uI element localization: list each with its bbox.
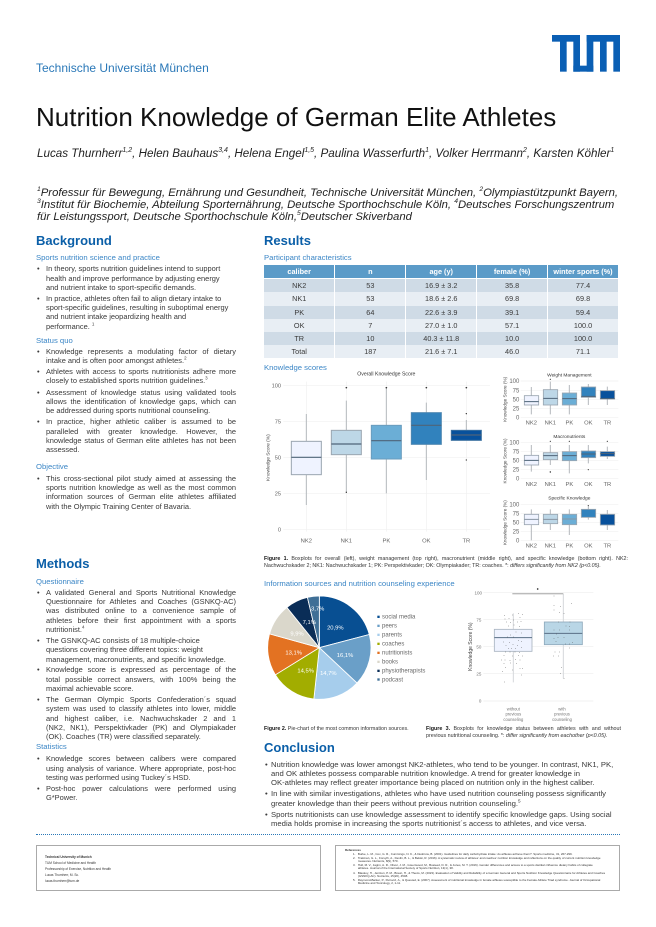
bullet: Knowledge score is expressed as percentage of the	[46, 665, 236, 674]
chart: macronutrients: NK2	[526, 482, 537, 488]
legend: parents	[382, 633, 402, 639]
chart: weight management: 25	[513, 406, 520, 412]
table: participant characteristics: PK	[294, 308, 304, 317]
chart: overall knowledge score boxplot: NK2	[301, 538, 312, 544]
chart: knowledge by counseling boxplot	[468, 588, 594, 722]
contact details: Technical University of Munich	[45, 855, 92, 859]
bullet: and nutrient intake to sport-specific demands.	[46, 283, 196, 292]
bullet: (NK2, NK1), Perspektivkader (PK) and Olympiakader	[46, 723, 236, 732]
chart: weight management: 0	[516, 415, 520, 421]
chart: overall knowledge score boxplot: NK1	[341, 538, 352, 544]
chart: knowledge by counseling boxplot: 0	[479, 699, 482, 704]
authors: Lucas Thurnherr1,2, Helen Bauhaus3,4, Helena Engel1,5, Paulina Wasserfurth1, Volker Herrmann2, Karsten Köhler1	[37, 147, 614, 160]
chart: knowledge by counseling boxplot: counseling	[503, 717, 524, 722]
table: participant characteristics: TR	[294, 334, 304, 343]
chart: specific knowledge: OK	[584, 543, 593, 549]
contact details: TUM School of Medicine and Health	[45, 861, 96, 865]
chart: information sources pie: 13,1%	[285, 650, 302, 656]
chart: information sources pie: 14,5%	[297, 669, 314, 675]
conclusion bullet: Sports nutritionists can use knowledge assessment to identify specific knowledge gaps. Using social	[271, 810, 612, 819]
panel: contact	[36, 845, 321, 891]
caption: figure 1: Figure 1. Boxplots for overall (left), weight management (top right), macronutrient (middle right), and specific knowledge (bottom right). NK2:	[264, 556, 628, 562]
bullet	[46, 417, 236, 455]
conclusion bullet	[271, 760, 616, 788]
significance bracket	[512, 592, 563, 596]
legend: social media	[382, 615, 416, 621]
chart: macronutrients: 50	[513, 459, 520, 465]
reference 4	[353, 870, 605, 878]
bullet: system was used to classify athletes into lower, middle	[46, 704, 236, 713]
bullet: athletes before their first appointment with a sports	[46, 616, 236, 625]
chart: specific knowledge: NK1	[545, 543, 556, 549]
chart: macronutrients: 100	[509, 440, 520, 446]
chart: weight management: 100	[509, 379, 520, 385]
table: participant characteristics: 46.0	[505, 347, 519, 356]
table: participant characteristics: 53	[366, 294, 374, 303]
chart: knowledge by counseling boxplot: with	[558, 707, 566, 712]
bullet	[46, 474, 236, 511]
panel: conclusion	[264, 740, 613, 828]
bullet	[46, 264, 236, 292]
bullet: testing was performed using Tuckey´s HSD.	[46, 773, 191, 782]
bullet: In practice, higher athletic caliber is assumed to be	[46, 417, 236, 426]
table: participant characteristics: female (%)	[494, 267, 530, 276]
bullet: In theory, sports nutrition guidelines intend to support	[46, 264, 220, 273]
chart: macronutrients: OK	[584, 482, 593, 488]
bullet: assessed.	[46, 445, 80, 454]
caption: figure 3	[426, 726, 621, 738]
affiliations: 3Institut für Biochemie, Abteilung Sporternährung, Deutsche Sporthochschule Köln, 4Deutsches Forschungszentrum	[37, 198, 614, 211]
panel: background	[36, 233, 236, 511]
heading: conclusion: Conclusion	[264, 740, 335, 755]
subheading: objective: Objective	[36, 462, 68, 471]
table: participant characteristics: 69.8	[505, 294, 519, 303]
chart: overall knowledge score boxplot: PK	[382, 538, 390, 544]
bullet: with the Olympic Training Center of Bavaria.	[46, 502, 191, 511]
conclusion bullet	[271, 810, 616, 828]
affiliations: für Leistungssport, Deutsche Sporthochschule Köln,5Deutscher Skiverband	[37, 210, 412, 223]
caption: figure 1: Nachwuchskader 2; NK1: Nachwuchskader 1; PK: Perspektivkader; OK: Olympiakader; TR: coaches. *: differs significantly from NK2 (p<0.05).	[264, 562, 601, 568]
table: participant characteristics: 18.6 ± 2.6	[425, 294, 457, 303]
contact details: lucas.thurnherr@tum.de	[45, 879, 79, 883]
table: participant characteristics: Total	[291, 347, 307, 356]
bullet: Assessment of knowledge status using validated tools	[46, 388, 236, 397]
chart: specific knowledge: 75	[513, 511, 520, 517]
table: participant characteristics: 100.0	[574, 321, 592, 330]
reference 3	[353, 863, 593, 870]
chart: macronutrients: Knowledge Score (%)	[502, 438, 507, 484]
chart: macronutrients: TR	[603, 482, 611, 488]
bullet	[46, 784, 236, 802]
chart: knowledge by counseling boxplot: counseling	[552, 717, 573, 722]
subheading: sports nutrition science and practice: Sports nutrition science and practice	[36, 253, 160, 262]
chart: weight management: 50	[513, 397, 520, 403]
table: participant characteristics: OK	[294, 321, 304, 330]
bullet: closely to established sports nutrition guidelines.3	[46, 376, 208, 385]
bullet: A validated General and Sports Nutritional Knowledge	[46, 588, 236, 597]
table: participant characteristics: 39.1	[505, 308, 519, 317]
table: participant characteristics: 22.6 ± 3.9	[425, 308, 457, 317]
chart: overall knowledge score boxplot: 0	[278, 527, 281, 533]
legend: physiotherapists	[382, 669, 425, 675]
legend: nutritionists	[382, 651, 412, 657]
bullet: G*Power.	[46, 793, 77, 802]
reference 2	[353, 856, 601, 863]
chart: overall knowledge score boxplot: TR	[462, 538, 470, 544]
chart: weight management: Weight Management	[547, 373, 592, 379]
references heading: References	[345, 848, 361, 852]
table: participant characteristics: 57.1	[505, 321, 519, 330]
bullet: Knowledge scores between calibers were compared	[46, 754, 236, 763]
chart: weight management: 75	[513, 388, 520, 394]
conclusion bullet: media holds promise in increasing the sports nutritionist´s access to athletes, and vice versa.	[271, 819, 586, 828]
table: participant characteristics: NK2	[292, 281, 306, 290]
chart: overall knowledge score boxplot: OK	[422, 538, 431, 544]
icon: TUM logo	[552, 35, 620, 72]
chart: specific knowledge: 25	[513, 529, 520, 535]
table: participant characteristics: 40.3 ± 11.8	[423, 334, 459, 343]
table: participant characteristics: winter sports (%)	[553, 267, 613, 276]
panel: methods	[36, 556, 236, 802]
chart: overall knowledge score boxplot: 75	[275, 420, 281, 426]
chart: weight management: TR	[603, 420, 611, 426]
table: participant characteristics: 27.0 ± 1.0	[425, 321, 457, 330]
caption: figure 3: previous nutritional counseling. *: differ significantly from eachother (p<0.05).	[426, 732, 607, 738]
legend: podcast	[382, 677, 403, 683]
table: participant characteristics: 100.0	[574, 334, 592, 343]
bullet: This cross-sectional pilot study aimed at assessing the	[46, 474, 236, 483]
conclusion bullet: In line with similar investigations, athletes who have used nutrition counseling possess significantly	[271, 789, 606, 798]
chart: specific knowledge: PK	[565, 543, 573, 549]
chart: knowledge by counseling boxplot: 75	[476, 617, 482, 622]
chart: knowledge by counseling boxplot: previous	[554, 712, 570, 717]
subheading: status quo: Status quo	[36, 336, 73, 345]
table: participant characteristics: 7	[368, 321, 372, 330]
bullet	[46, 388, 236, 416]
reference 5: Medicine and Toxicology, 2, 1-11.	[358, 881, 401, 885]
table: participant characteristics: NK1	[292, 294, 306, 303]
table: participant characteristics: 10.0	[505, 334, 519, 343]
bullet: The GSNKQ-AC consists of 18 multiple-choice	[46, 636, 200, 645]
reference 4: 4. Blaukoy, H., Jentzen, P. M., Braun, H., & Thevis, M. (2023). Evaluation of Validity and Reliability of a German General and Sports Nutrition Knowledge Questionnaire for Athletes and Coaches	[353, 870, 605, 874]
bullet: be addressed during sports nutritional counseling.	[46, 406, 210, 415]
chart: weight management: NK1	[545, 420, 556, 426]
bullet: and highest caliber, i.e. Nachwuchskader 2 and 1	[46, 714, 236, 723]
contact details: Professorship of Exercise, Nutrition and Health	[45, 867, 111, 871]
chart: specific knowledge: Knowledge Score (%)	[502, 500, 507, 545]
reference 3: athletes. Journal of the International Society of Sports Nutrition, 13(1), 38.	[358, 866, 454, 870]
chart: overall knowledge score boxplot: Knowledge Score (%)	[266, 434, 272, 481]
chart: macronutrients: 25	[513, 468, 520, 474]
chart: specific knowledge: TR	[603, 543, 611, 549]
panel: references	[335, 845, 620, 891]
chart: specific knowledge: NK2	[526, 543, 537, 549]
table: participant characteristics: 53	[366, 281, 374, 290]
reference 3: 3. Hull, M. V., Jagim, A. R., Oliver, J. M., Greenwood, M., Busteed, D. R., & Jones, M. T. (2016). Gender differences and access to a sports dietitian influence dietary habits of collegiate	[353, 863, 593, 867]
reference 4: (GSNKQ-AC). Nutrients, 15(20), 4508.	[358, 874, 408, 878]
contact details	[45, 855, 111, 883]
bullet: performance. 1	[46, 321, 94, 331]
chart: specific knowledge: Specific Knowledge	[548, 496, 591, 502]
bullet: health and improve performance by adjusting energy	[46, 274, 220, 283]
bullet: Post-hoc power calculations were performed using	[46, 784, 236, 793]
chart: specific knowledge	[502, 496, 618, 549]
table: participant characteristics: caliber	[287, 267, 311, 276]
chart: knowledge by counseling boxplot: 50	[476, 644, 482, 649]
chart: macronutrients: NK1	[545, 482, 556, 488]
conclusion bullet	[271, 789, 616, 808]
bullet	[46, 347, 236, 366]
chart: information sources pie	[268, 596, 426, 699]
chart: macronutrients: PK	[565, 482, 573, 488]
legend: coaches	[382, 642, 404, 648]
chart: knowledge by counseling boxplot: previous	[505, 712, 521, 717]
bullet	[46, 636, 236, 664]
table: participant characteristics: 187	[364, 347, 376, 356]
heading: results: Results	[264, 233, 311, 248]
legend	[377, 615, 425, 683]
chart: macronutrients: 75	[513, 450, 520, 456]
table: participant characteristics: 69.8	[576, 294, 590, 303]
affiliations	[37, 186, 618, 223]
chart: information sources pie: 7,1%	[303, 620, 316, 626]
chart: weight management: NK2	[526, 420, 537, 426]
heading: background: Background	[36, 233, 112, 248]
university name: Technische Universität München	[36, 61, 209, 75]
conclusion bullet: Nutrition knowledge was lower amongst NK2-athletes, who tend to be younger. In contrast, NK1, PK,	[271, 760, 613, 769]
affiliations: 1Professur für Bewegung, Ernährung und Gesundheit, Technische Universität München, 2Olympiastützpunkt Bayern,	[37, 186, 618, 199]
chart: information sources pie: 14,7%	[320, 671, 337, 677]
bullet: information sources of German elite athletes affiliated	[46, 492, 236, 501]
table: participant characteristics: 21.6 ± 7.1	[425, 347, 457, 356]
table: participant characteristics	[264, 265, 618, 358]
chart: overall knowledge score boxplot: 100	[272, 384, 281, 390]
bullet: allows the identification of knowledge gaps, which can	[46, 397, 236, 406]
chart: specific knowledge: 0	[516, 538, 520, 544]
bullet	[46, 367, 236, 386]
footer divider	[36, 834, 620, 835]
bullet: nutritionist.4	[46, 624, 84, 634]
chart: information sources pie: 3,7%	[311, 606, 324, 612]
bullet: Athletes with access to sports nutritionists adhere more	[46, 367, 236, 376]
chart: macronutrients	[502, 434, 618, 488]
contact details: Lucas Thurnherr, M. Sc.	[45, 873, 79, 877]
chart: knowledge by counseling boxplot: 100	[474, 590, 482, 595]
table: participant characteristics: 77.4	[576, 281, 590, 290]
bullet: The German Olympic Sports Confederation´s squad	[46, 695, 236, 704]
chart: knowledge by counseling boxplot: Knowledge Score (%)	[468, 622, 474, 671]
table: participant characteristics: n	[368, 267, 373, 276]
table: participant characteristics: 16.9 ± 3.2	[425, 281, 457, 290]
reference 5: 5. Raymond-Barker, P., Petroczi, A., & Quested, E. (2007). Assessment of nutritional knowledge in female athletes susceptible to the Female Athlete Triad syndrome. Journal of Occupational	[353, 878, 600, 882]
subheading: information sources: Information sources and nutrition counseling experience	[264, 579, 455, 588]
chart: knowledge by counseling boxplot: without	[507, 707, 521, 712]
bullet	[46, 754, 236, 782]
bullet: management, macronutrients, and specific knowledge.	[46, 655, 226, 664]
bullet	[46, 665, 236, 693]
significance star	[537, 588, 538, 590]
caption: figure 3: Figure 3. Boxplots for knowledge status between athletes with and without	[426, 726, 621, 732]
charts: subscale boxplots	[502, 373, 618, 549]
table: participant characteristics: 59.4	[576, 308, 590, 317]
subheading: knowledge scores: Knowledge scores	[264, 363, 327, 372]
chart: knowledge by counseling boxplot: 25	[476, 671, 482, 676]
bullet: intake and is often poor amongst athletes.2	[46, 356, 187, 365]
bullet: knowledge status of German elite athletes has not been	[46, 436, 236, 445]
chart: specific knowledge: 50	[513, 520, 520, 526]
reference 2: measures. Nutrients, 8(9), 570.	[358, 859, 398, 863]
subheading: statistics: Statistics	[36, 742, 67, 751]
chart: overall knowledge score boxplot: 50	[275, 456, 281, 462]
bullet: total possible correct answers, with 100% being the	[46, 675, 236, 684]
chart: information sources pie: 9,9%	[290, 632, 304, 638]
bullet	[46, 588, 236, 634]
bullet: (OK). Coaches (TR) were classified separately.	[46, 732, 201, 741]
table: participant characteristics: 71.1	[576, 347, 590, 356]
bullet: Questionnaire for Athletes and Coaches (GSNKQ-AC)	[46, 597, 236, 606]
subheading: participant characteristics: Participant characteristics	[264, 253, 352, 262]
chart: information sources pie: 20,9%	[327, 625, 344, 631]
bullet	[46, 695, 236, 742]
table: participant characteristics: age (y)	[429, 267, 453, 276]
bullet: using analysis of variance. Where appropriate, post-hoc	[46, 764, 236, 773]
conclusion bullet: OK-athletes may reflect greater importance being placed on nutrition only in the highest caliber.	[271, 778, 594, 787]
bullet: was distributed online to a convenience sample of	[46, 606, 236, 615]
conclusion bullet: greater knowledge than their peers without previous nutrition counseling.5	[271, 798, 521, 808]
bullet: questions covering three different topics: weight	[46, 645, 203, 654]
bullet: and nutrient intake jeopardizing health and	[46, 312, 186, 321]
bullet	[46, 294, 236, 331]
bullet: Knowledge represents a modulating factor of dietary	[46, 347, 236, 356]
table: participant characteristics: 35.8	[505, 281, 519, 290]
chart: weight management: Knowledge Score (%)	[502, 376, 507, 422]
reference 1: 1. Burke, L. M., Cox, G. R., Cummings, N. K., & Desbrow, B. (2001). Guidelines for daily carbohydrate intake: do athletes achieve them?. Sports medicine, 31, 267-299.	[353, 852, 572, 856]
chart: overall knowledge score boxplot: 25	[275, 491, 281, 497]
chart: overall knowledge score boxplot	[266, 372, 490, 544]
reference 2: 2. Trakman, G. L., Forsyth, A., Devlin, B. L., & Belski, R. (2016). A systematic review of athletes' and coaches' nutrition knowledge and reflections on the quality of current nutrition knowledge	[353, 856, 601, 860]
legend: books	[382, 660, 398, 666]
chart: weight management: OK	[584, 420, 593, 426]
bullet: paralleled with greater knowledge. However, the	[46, 427, 236, 436]
chart: overall knowledge score boxplot: Overall Knowledge Score	[357, 372, 416, 378]
table: participant characteristics: 64	[366, 308, 374, 317]
bullet: maximal achievable score.	[46, 684, 134, 693]
heading: methods: Methods	[36, 556, 89, 571]
chart: macronutrients: 0	[516, 477, 520, 483]
reference 5	[353, 878, 600, 885]
chart: information sources pie: 16,1%	[337, 653, 353, 659]
conclusion bullet: and OK athletes possess comparable nutrition knowledge. A trend for greater knowledge in	[271, 769, 580, 778]
bullet: In practice, athletes often fail to align dietary intake to	[46, 294, 221, 303]
title: Nutrition Knowledge of German Elite Athletes	[36, 102, 556, 132]
bullet: sports nutrition knowledge as well as the most common	[46, 483, 236, 492]
caption: figure 2: Figure 2. Pie-chart of the most common information sources.	[264, 726, 409, 732]
chart: weight management	[502, 373, 618, 426]
subheading: questionnaire: Questionnaire	[36, 577, 84, 586]
legend: peers	[382, 624, 397, 630]
bullet: sport-specific guidelines, resulting in suboptimal energy	[46, 303, 228, 312]
chart: specific knowledge: 100	[509, 502, 520, 508]
caption: figure 1	[264, 556, 628, 568]
table: participant characteristics: 10	[366, 334, 374, 343]
chart: macronutrients: Macronutrients	[553, 434, 586, 440]
chart: weight management: PK	[565, 420, 573, 426]
